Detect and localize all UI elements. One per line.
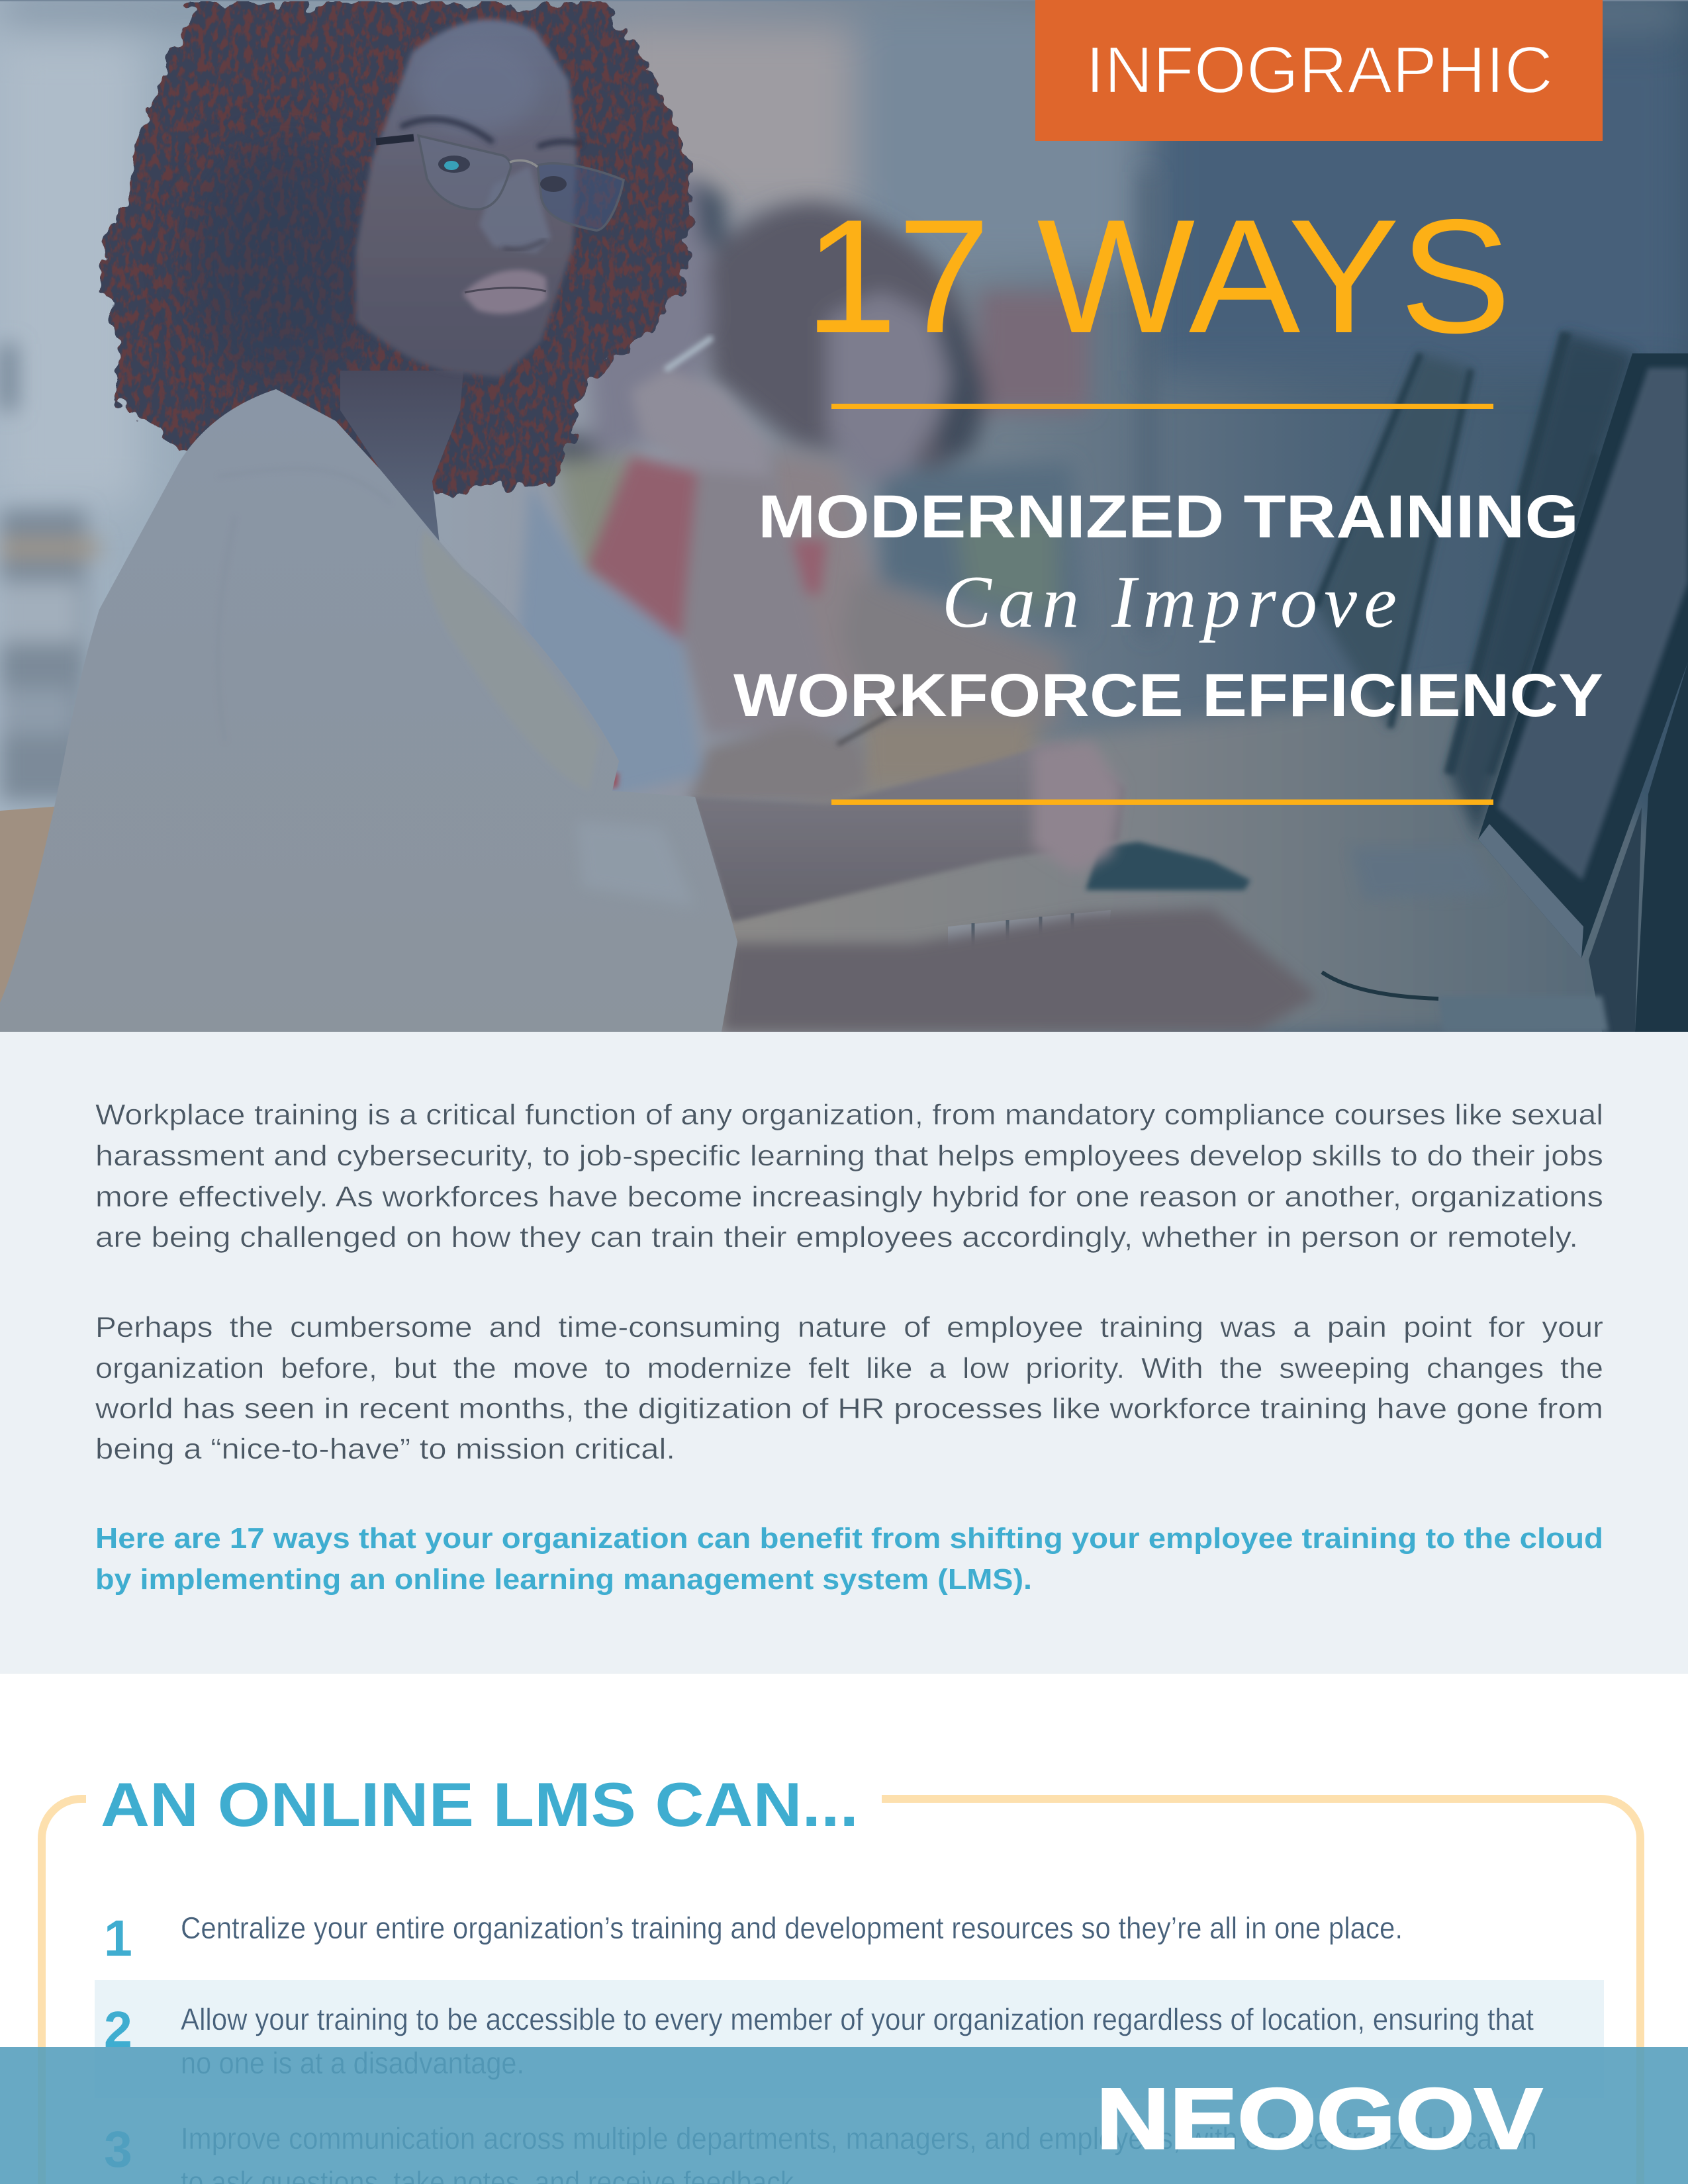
hair	[99, 4, 693, 493]
intro callout: Here are 17 ways that your organization can benefit from shifting your employee training to the cloud	[95, 1522, 1603, 1555]
intro paragraph two: world has seen in recent months, the digitization of HR processes like workforce training have gone from	[95, 1392, 1603, 1425]
badge: infographic: INFOGRAPHIC	[1086, 33, 1553, 107]
intro paragraph one: Workplace training is a critical function of any organization, from mandatory compliance courses like sexual	[95, 1099, 1603, 1131]
subtitle: modernized training can improve workforce efficiency	[733, 483, 1603, 729]
eyes	[438, 156, 567, 192]
sweater	[0, 389, 737, 1032]
list item 1	[104, 1910, 1403, 1967]
intro paragraph two: Perhaps the cumbersome and time-consuming nature of employee training was a pain point for your	[95, 1311, 1603, 1343]
arm and hand	[692, 741, 1317, 1032]
list item 3: 3	[104, 2121, 132, 2178]
subtitle: modernized training can improve workforce efficiency: WORKFORCE EFFICIENCY	[733, 662, 1603, 729]
intro paragraph two: organization before, but the move to modernize felt like a low priority. With the sweeping changes the	[95, 1352, 1603, 1385]
logo: neogov: NEOGOV	[1096, 2070, 1542, 2167]
title: 17 ways: 17 WAYS	[804, 185, 1511, 367]
woman	[0, 4, 737, 1032]
intro paragraph two: being a “nice-to-have” to mission critical.	[95, 1433, 675, 1465]
list item 1: Centralize your entire organization’s training and development resources so they’re all in one place.	[181, 1911, 1403, 1945]
list item 2: Allow your training to be accessible to every member of your organization regardless of location, ensuring that	[181, 2002, 1534, 2036]
subtitle: modernized training can improve workforce efficiency: MODERNIZED TRAINING	[758, 483, 1579, 551]
nose	[479, 165, 551, 253]
subtitle: modernized training can improve workforce efficiency: Can Improve	[942, 561, 1397, 643]
monitors	[1316, 332, 1688, 1032]
intro paragraph one	[95, 1099, 1603, 1253]
scarf folds	[421, 529, 599, 791]
eyebrows	[400, 119, 583, 147]
intro paragraph one: harassment and cybersecurity, to job-specific learning that helps employees develop skills to do their jobs	[95, 1140, 1603, 1172]
list item 3	[104, 2121, 1537, 2184]
intro paragraph one: are being challenged on how they can train their employees accordingly, whether in person or remotely.	[95, 1221, 1578, 1253]
intro callout	[95, 1522, 1603, 1596]
footer band	[0, 2047, 1688, 2184]
intro callout: by implementing an online learning management system (LMS).	[95, 1563, 1032, 1596]
badge: infographic	[1035, 0, 1603, 141]
neck	[340, 371, 463, 549]
list item 2: no one is at a disadvantage.	[181, 2046, 524, 2080]
panel: introduction	[0, 1032, 1688, 1674]
chair	[0, 806, 54, 1003]
intro paragraph two	[95, 1311, 1603, 1465]
mouse	[1086, 842, 1250, 890]
list item 3: Improve communication across multiple departments, managers, and employees, with one centralized location	[181, 2121, 1537, 2156]
lips	[463, 270, 547, 314]
list item 1: 1	[104, 1910, 132, 1967]
desk	[695, 682, 1688, 1032]
face	[356, 20, 577, 377]
panel: an online LMS can list	[42, 1770, 1640, 2184]
mouse cable	[1322, 972, 1438, 999]
list item 2	[95, 1980, 1604, 2098]
heading: an online LMS can: AN ONLINE LMS CAN...	[101, 1770, 859, 1839]
intro paragraph one: more effectively. As workforces have become increasingly hybrid for one reason or another, organizations	[95, 1181, 1603, 1213]
glasses	[376, 136, 624, 230]
list item 2: 2	[104, 2001, 132, 2058]
keyboard	[948, 910, 1111, 940]
background colleagues	[549, 172, 1089, 788]
hero photo: woman at computer training	[0, 0, 1688, 1032]
